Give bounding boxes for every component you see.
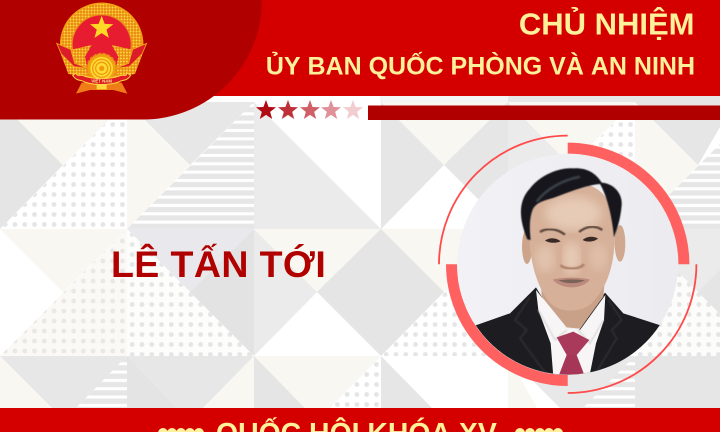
- ring: thick coral arcs: [452, 148, 684, 380]
- brows: [540, 229, 565, 235]
- footer right ornament: [515, 428, 563, 432]
- portrait: [457, 154, 678, 387]
- title: position: CHỦ NHIỆM: [519, 6, 694, 42]
- rating stars: [256, 100, 363, 119]
- name: LÊ TẤN TỚI: [111, 243, 326, 285]
- dark red bar: [368, 106, 720, 120]
- footer band: [0, 408, 720, 432]
- face: [529, 183, 615, 311]
- tie: [557, 332, 589, 355]
- footer left ornament: [158, 428, 204, 432]
- nose: [561, 264, 584, 269]
- left ear: [522, 231, 531, 264]
- emblem ribbon: [76, 83, 127, 94]
- emblem star: [90, 16, 113, 38]
- suit: [476, 288, 660, 375]
- hair: [521, 168, 622, 240]
- emblem right wheat and flap: [112, 43, 147, 76]
- right ear: [615, 225, 625, 262]
- emblem gear: [87, 54, 116, 83]
- title: committee: ỦY BAN QUỐC PHÒNG VÀ AN NINH: [266, 50, 695, 80]
- national emblem: [57, 3, 147, 94]
- ring: thin red arcs: [439, 136, 696, 393]
- national emblem: VIỆT NAM: [91, 79, 112, 84]
- header red band: [0, 0, 720, 96]
- eyes: [545, 238, 561, 243]
- background geometric pattern: [0, 96, 720, 408]
- neck: [541, 286, 604, 329]
- mouth: [553, 278, 590, 287]
- header dark red emblem panel: [0, 0, 262, 120]
- emblem left wheat and flap: [57, 43, 92, 76]
- shirt: [536, 290, 605, 377]
